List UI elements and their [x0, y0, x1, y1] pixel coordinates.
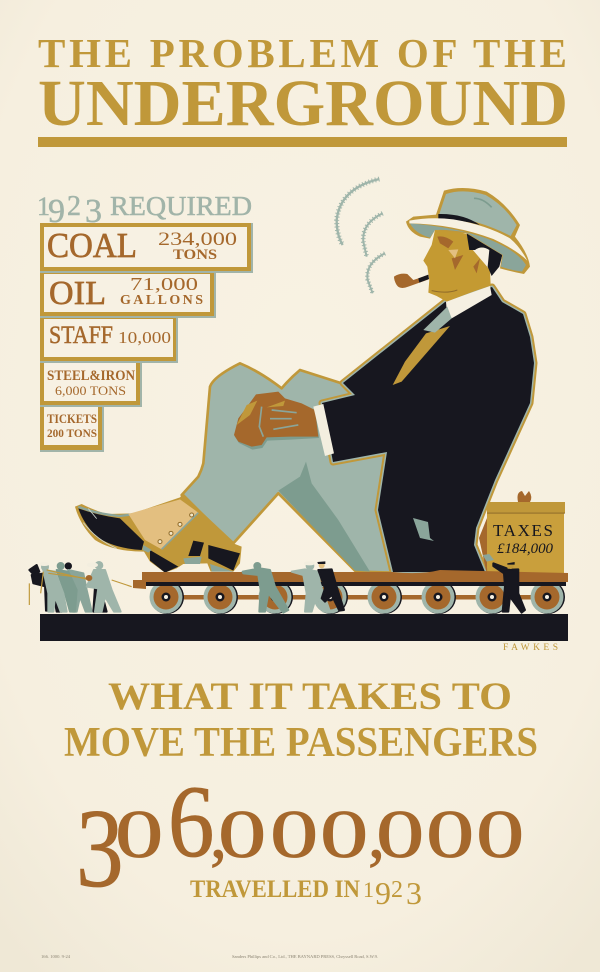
box: staff [40, 318, 178, 363]
heading: 1923 required: 9 [48, 193, 65, 230]
passenger number: 6 [168, 765, 214, 879]
box: coal: COAL [47, 226, 137, 265]
passenger number [76, 765, 524, 911]
icon: pipe smoke [337, 179, 385, 293]
caption: travelled in 1923: 3 [406, 875, 422, 911]
hat [406, 188, 530, 274]
taxes box: TAXES [493, 521, 553, 540]
passenger number: , [368, 796, 385, 872]
rail bed [40, 614, 568, 641]
box: tickets: 200 TONS [47, 426, 97, 440]
caption: travelled in 1923: 2 [391, 877, 403, 903]
title [38, 30, 568, 140]
printer's imprint: Sanders Phillips and Co., Ltd., THE BAYNARD PRESS, Chryssell Road, S.W.9. [232, 954, 378, 960]
passenger number: , [210, 796, 227, 872]
box: steel and iron: 6,000 TONS [55, 383, 126, 398]
hauling men [29, 562, 288, 613]
wagon flatbed [133, 570, 568, 589]
box: coal: 234,000 [158, 229, 237, 250]
heading: 1923 required: 3 [85, 193, 102, 230]
box: oil: OIL [49, 275, 106, 312]
trousers [182, 363, 394, 573]
subheading [64, 675, 538, 766]
box: tickets [40, 407, 104, 452]
head, hat and pipe [393, 188, 530, 385]
box: tickets: TICKETS [47, 411, 97, 426]
caption: travelled in 1923: TRAVELLED IN [190, 876, 360, 903]
box: steel and iron [40, 363, 142, 407]
taxes box: £184,000 [497, 541, 553, 557]
passenger number: 0 [218, 796, 266, 872]
passenger number: 0 [115, 796, 163, 872]
heading: 1923 required: 2 [67, 191, 81, 222]
passenger number: 0 [376, 796, 424, 872]
man at third wheel [243, 563, 288, 613]
wagon wheels [150, 580, 565, 614]
box: staff: STAFF [49, 322, 113, 349]
pushing men [292, 554, 525, 613]
pipe [394, 274, 429, 288]
subheading: WHAT IT TAKES TO [108, 675, 512, 718]
caption: travelled in 1923: 9 [375, 875, 391, 911]
box: coal: TONS [173, 247, 217, 263]
hand [234, 392, 334, 456]
necktie [423, 307, 452, 333]
passenger number: 0 [270, 796, 318, 872]
box: oil: 71,000 [130, 274, 198, 294]
heading: 1923 required: REQUIRED [110, 191, 252, 221]
box: oil: GALLONS [120, 293, 203, 308]
box: staff: 10,000 [118, 328, 171, 347]
coat [322, 287, 534, 572]
printer's imprint: 166. 1000. 9-24 [41, 954, 71, 959]
passenger number: 0 [426, 796, 474, 872]
title: THE PROBLEM OF THE [38, 30, 567, 76]
shirt collar [446, 286, 492, 318]
subheading: MOVE THE PASSENGERS [64, 720, 538, 766]
box: coal [40, 223, 253, 273]
heading: 1923 required: 1 [37, 192, 50, 221]
stacked requirement boxes [40, 223, 253, 452]
title: UNDERGROUND [38, 67, 568, 140]
passenger number: 0 [476, 796, 524, 872]
hair [467, 233, 502, 276]
printer's imprint [41, 954, 378, 960]
waistcoat [393, 326, 450, 385]
caption: travelled in 1923: 1 [363, 877, 374, 902]
taxes box [487, 491, 565, 573]
artist signature: FAWKES [503, 643, 558, 653]
passenger number: 0 [320, 796, 368, 872]
face [423, 230, 491, 302]
title rule [38, 137, 567, 147]
shirt cuff [313, 404, 334, 456]
wagon axle bar [150, 595, 550, 600]
box: oil [40, 273, 216, 318]
shoe and spat [75, 493, 242, 573]
box: steel and iron: STEEL&IRON [47, 368, 135, 384]
passenger number: 3 [76, 787, 124, 911]
